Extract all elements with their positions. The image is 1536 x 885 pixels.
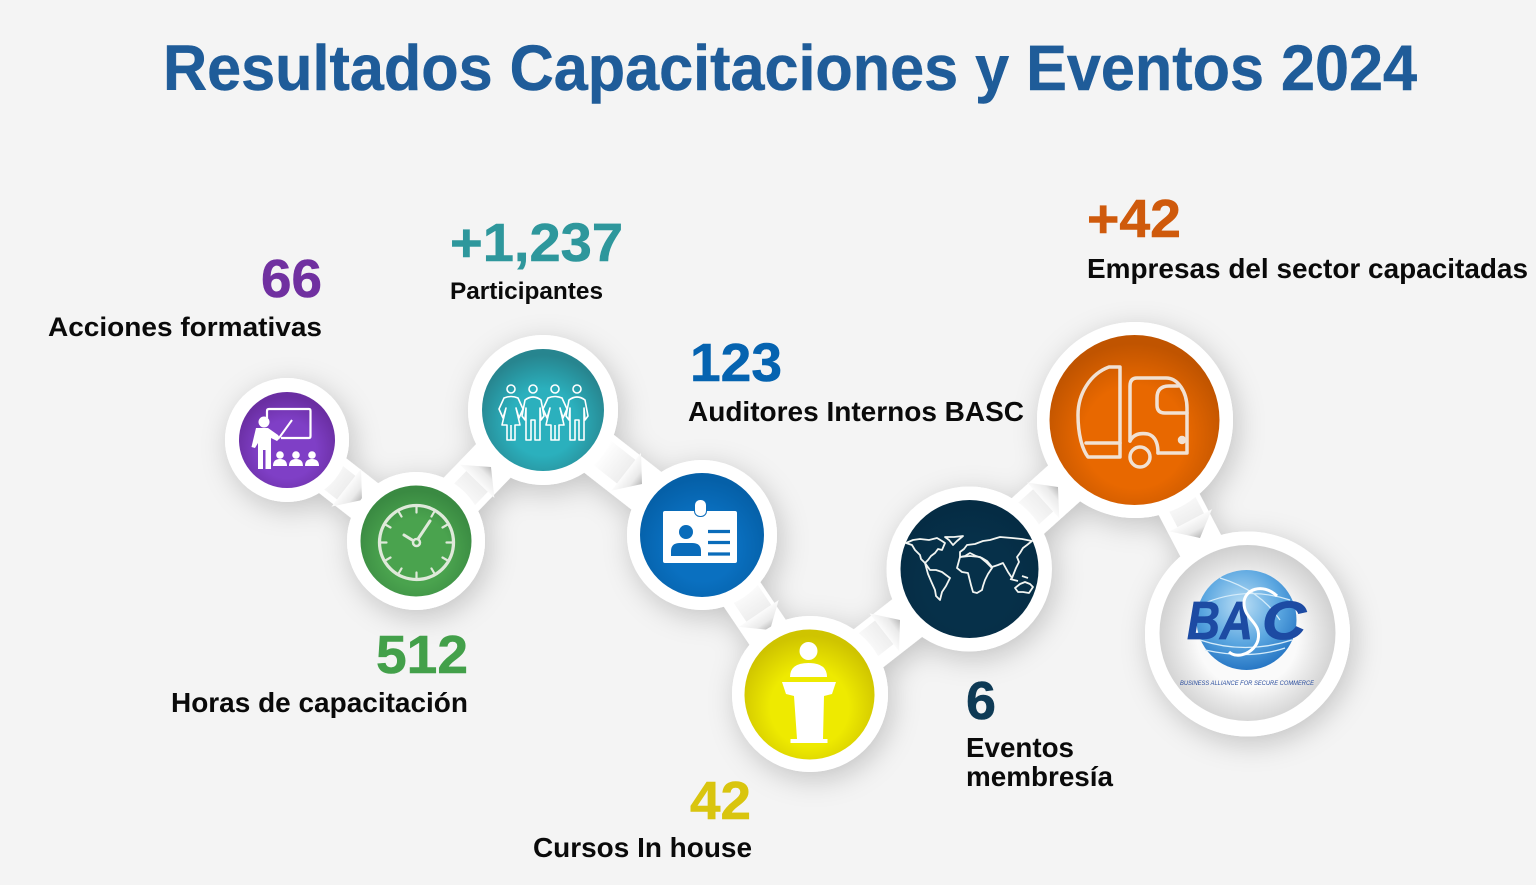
- stat: acciones formativas: 66: [261, 249, 322, 309]
- stat: horas de capacitacion: Horas de capacitación: [171, 687, 468, 718]
- stat: participantes: [450, 213, 623, 305]
- icon: speaker at podium: [782, 642, 836, 743]
- stat: eventos membresia: membresía: [966, 761, 1113, 792]
- node: BASC logo: [1145, 532, 1350, 736]
- node: cursos in house: [732, 616, 888, 772]
- icon: clock: [380, 506, 454, 580]
- stat: auditores internos: Auditores Internos BASC: [688, 396, 1024, 427]
- stat: horas de capacitacion: [171, 625, 468, 718]
- stat: cursos in house: Cursos In house: [533, 832, 752, 863]
- arrow: eventos to empresas: [1003, 469, 1074, 540]
- arrow: empresas to BASC: [1155, 481, 1221, 549]
- node: horas de capacitacion: [347, 472, 485, 610]
- stat: horas de capacitacion: 512: [376, 625, 468, 685]
- arrow: cursos to eventos: [844, 601, 915, 671]
- arrow: acciones to horas: [306, 449, 377, 519]
- icon: group of people: [499, 385, 588, 440]
- icon: BASC globe logo: BUSINESS ALLIANCE FOR SECURE COMMERCE: [1180, 680, 1315, 687]
- node: participantes: [468, 335, 618, 485]
- stat: empresas capacitadas: [1087, 189, 1528, 284]
- stat: eventos membresia: Eventos: [966, 732, 1074, 763]
- stat: cursos in house: 42: [690, 771, 751, 831]
- icon: BASC globe logo: C: [1262, 591, 1307, 651]
- icon: world map: [906, 536, 1033, 600]
- icon: truck: [1078, 367, 1187, 467]
- stat: cursos in house: [533, 771, 752, 863]
- stat: eventos membresia: [966, 671, 1113, 792]
- arrow: horas to participantes: [438, 450, 508, 521]
- title: Resultados Capacitaciones y Eventos 2024: [163, 32, 1417, 104]
- stat: acciones formativas: [48, 249, 322, 342]
- stat: auditores internos: [688, 333, 1024, 427]
- arrow: participantes to auditores: [586, 433, 657, 503]
- icon: teacher at board: [252, 409, 319, 469]
- node: empresas capacitadas: [1037, 322, 1233, 518]
- node: acciones formativas: [225, 378, 349, 502]
- icon: BASC globe logo: [1180, 570, 1315, 687]
- stat: empresas capacitadas: Empresas del sector capacitadas: [1087, 253, 1528, 284]
- stat: eventos membresia: 6: [966, 671, 996, 731]
- connected white chain silhouette: [225, 322, 1350, 772]
- node: auditores internos: [627, 460, 777, 610]
- stat: empresas capacitadas: +42: [1087, 189, 1181, 249]
- arrow: auditores to cursos: [721, 573, 790, 643]
- stat: participantes: +1,237: [450, 213, 623, 273]
- node: eventos membresia: [887, 486, 1052, 652]
- stat: acciones formativas: Acciones formativas: [48, 312, 322, 342]
- icon: id badge: [663, 500, 737, 563]
- stat: auditores internos: 123: [690, 333, 782, 393]
- icon: BASC globe logo: BA: [1187, 591, 1253, 651]
- stat: participantes: Participantes: [450, 278, 603, 305]
